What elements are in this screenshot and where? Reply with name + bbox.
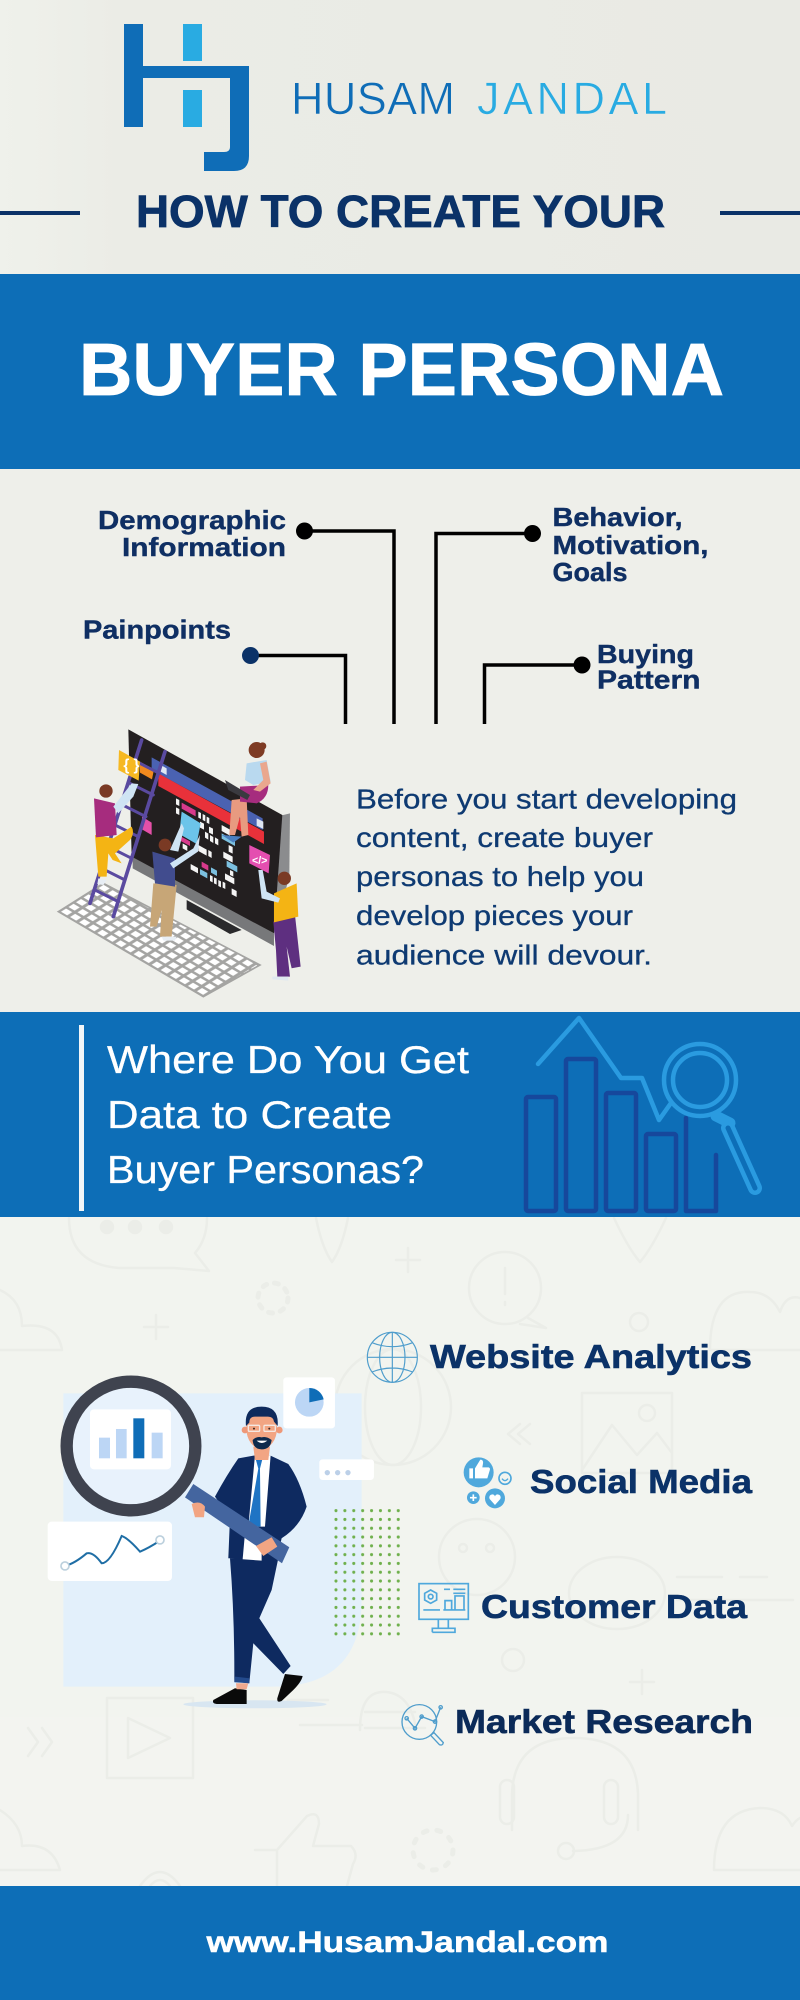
list item: Market Research: Market Research (455, 1703, 753, 1740)
heading: How to create your: HOW TO CREATE YOUR (136, 186, 665, 237)
paragraph: intro: audience will devour. (356, 940, 652, 970)
pie chart card (283, 1377, 335, 1428)
list item: Social Media: Social Media (530, 1463, 753, 1500)
connector: Behavior, Motivation, Goals (436, 502, 708, 724)
illustration: businessman with magnifying glass (48, 1377, 401, 1708)
connector: Buying Pattern (484, 639, 700, 724)
band: where do you get data: Data to Create (107, 1094, 392, 1137)
connector: Demographic Information (98, 505, 394, 724)
pink code card (249, 845, 270, 873)
band: where do you get data: Where Do You Get (107, 1039, 469, 1082)
background: ghost icons (0, 1218, 800, 1886)
hands gripping handle (192, 1502, 277, 1556)
paragraph: intro: content, create buyer (356, 822, 653, 853)
dots card (319, 1459, 374, 1480)
band: where do you get data: Buyer Personas? (107, 1149, 424, 1192)
list item: Website Analytics (367, 1332, 752, 1382)
magnifying glass handle (185, 1484, 289, 1563)
light blue panel (63, 1393, 362, 1687)
connector: Demographic Information: Demographic (98, 505, 286, 535)
illustration: team building a website on a giant monitor (58, 729, 301, 997)
floor shadow (183, 1700, 327, 1708)
heading: How to create your (0, 186, 800, 237)
paragraph: intro: Before you start developing (356, 784, 737, 814)
paragraph: intro: personas to help you (356, 861, 644, 892)
connector: Buying Pattern: Buying (597, 639, 694, 669)
html card (179, 812, 201, 844)
list item: Market Research (402, 1703, 753, 1745)
list item: Social Media (464, 1457, 753, 1508)
seated person with laptop (222, 742, 271, 843)
list item: Customer Data: Customer Data (481, 1588, 748, 1625)
yellow code card: { } (123, 757, 140, 774)
keyboard (58, 883, 260, 997)
connector: Behavior, Motivation, Goals: Motivation, (552, 530, 708, 560)
icon: bar chart with magnifier (526, 1018, 755, 1211)
logo wordmark: JANDAL (477, 73, 667, 124)
paragraph: intro (356, 784, 737, 970)
footer: website: www.HusamJandal.com (205, 1926, 608, 1959)
monitor (128, 729, 290, 946)
title band: Buyer Persona: BUYER PERSONA (79, 328, 724, 411)
connector: Behavior, Motivation, Goals: Behavior, (552, 502, 682, 532)
list item: Customer Data (419, 1584, 748, 1632)
connector: Demographic Information: Information (122, 532, 286, 562)
green dot grid (334, 1509, 401, 1636)
connector: Buying Pattern: Pattern (597, 664, 700, 694)
logo wordmark: HUSAM (291, 73, 455, 124)
line chart card (48, 1522, 172, 1581)
yellow code card (118, 750, 140, 781)
connector: Behavior, Motivation, Goals: Goals (552, 557, 628, 587)
paragraph: intro: develop pieces your (356, 900, 633, 931)
band: where do you get data (0, 1012, 800, 1217)
ladder (90, 740, 165, 917)
magnifying glass (67, 1382, 195, 1510)
businessman (213, 1407, 307, 1704)
logo: Husam Jandal HJ mark (124, 24, 249, 171)
center person (150, 823, 200, 941)
pink code card: </> (252, 855, 267, 867)
connector: Painpoints: Painpoints (83, 614, 231, 644)
connector: Painpoints (83, 614, 346, 724)
footer: website (0, 1886, 800, 2000)
logo wordmark (291, 73, 667, 124)
right person (258, 870, 301, 981)
title band: Buyer Persona (0, 274, 800, 469)
list item: Website Analytics: Website Analytics (430, 1338, 752, 1375)
climbing person (94, 783, 138, 885)
